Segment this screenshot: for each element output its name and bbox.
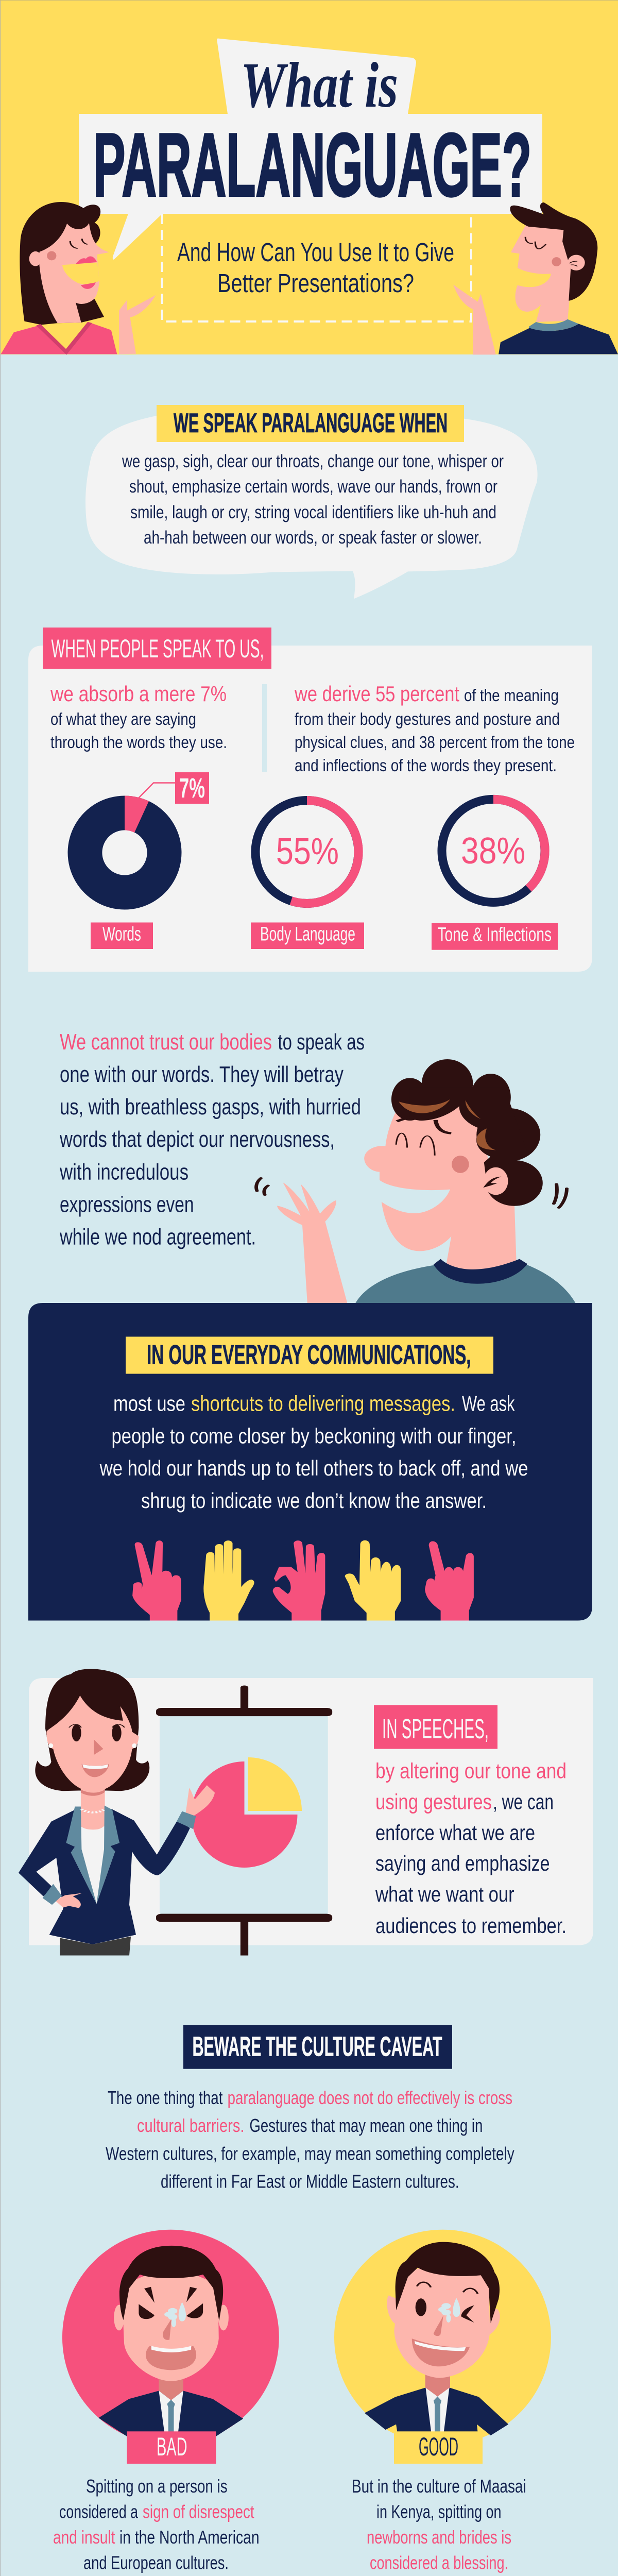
body text xyxy=(53,2476,260,2573)
chart: words donut 7% xyxy=(68,772,209,910)
chart: body language ring 55%: 55% xyxy=(276,831,339,872)
body text: , we can xyxy=(493,1790,554,1814)
heading xyxy=(157,405,464,442)
collar xyxy=(434,1259,527,1284)
body text xyxy=(122,451,504,548)
body text: considered a xyxy=(59,2501,139,2522)
label: body language: Body Language xyxy=(260,924,355,945)
body text: Spitting on a person is xyxy=(86,2476,228,2497)
panel background xyxy=(28,1303,592,1621)
panel: bad example xyxy=(53,2230,279,2573)
body text: and European cultures. xyxy=(83,2552,229,2573)
column divider xyxy=(262,684,267,772)
label: tone and inflections xyxy=(432,923,558,950)
text block: we cannot trust our bodies: with incredulous xyxy=(59,1159,188,1185)
body text xyxy=(99,1392,528,1513)
illustration: talking man xyxy=(453,202,618,354)
label: bad: BAD xyxy=(157,2432,187,2461)
eyes xyxy=(396,1133,435,1156)
right text: from their body gestures and posture and xyxy=(295,709,560,728)
illustration: presenting woman xyxy=(19,1669,215,1956)
speech bubble xyxy=(85,416,538,599)
body text: shrug to indicate we don’t know the answer. xyxy=(141,1488,487,1513)
illustration: talking woman xyxy=(1,202,156,354)
icon: open hand xyxy=(203,1540,254,1621)
body text: most use xyxy=(113,1392,185,1416)
subtitle xyxy=(177,238,454,298)
right text: of the meaning xyxy=(464,686,559,705)
body text: newborns and brides is xyxy=(367,2527,511,2548)
left text xyxy=(50,682,227,752)
section: beware the culture caveat xyxy=(106,2025,514,2192)
motion lines xyxy=(256,1178,567,1208)
left text: through the words they use. xyxy=(50,733,227,752)
body text: using gestures xyxy=(375,1790,492,1814)
body text xyxy=(375,1758,566,1938)
body text: by altering our tone and xyxy=(375,1758,566,1783)
body text: We ask xyxy=(462,1392,515,1416)
body text: audiences to remember. xyxy=(375,1913,566,1938)
ear xyxy=(484,1167,508,1195)
body text: Gestures that may mean one thing in xyxy=(249,2115,483,2136)
label: words: Words xyxy=(102,924,141,945)
body text: The one thing that xyxy=(108,2087,222,2108)
body text: shortcuts to delivering messages. xyxy=(191,1392,455,1416)
chart: tone and inflections ring 38% xyxy=(442,799,545,902)
body text: smile, laugh or cry, string vocal identifiers like uh-huh and xyxy=(130,502,496,522)
hair xyxy=(391,1059,543,1206)
panel: we speak paralanguage when xyxy=(85,405,538,599)
chart: tone and inflections ring 38%: 38% xyxy=(461,831,525,872)
body text: Western cultures, for example, may mean something completely xyxy=(106,2143,514,2164)
heading: WHEN PEOPLE SPEAK TO US, xyxy=(52,634,264,663)
left text: we absorb a mere 7% xyxy=(50,682,227,706)
label: words xyxy=(91,922,153,949)
blush xyxy=(452,1156,469,1173)
heading xyxy=(126,1336,493,1374)
panel background xyxy=(29,1678,593,1945)
label: tone and inflections: Tone & Inflections xyxy=(438,924,552,946)
body text: different in Far East or Middle Eastern cultures. xyxy=(161,2171,459,2192)
body text xyxy=(106,2087,514,2192)
label: good xyxy=(394,2431,483,2464)
body text: cultural barriers. xyxy=(137,2115,244,2136)
heading xyxy=(374,1705,497,1749)
body text: in the North American xyxy=(119,2527,260,2548)
right text: and inflections of the words they present. xyxy=(295,756,557,775)
text block: we cannot trust our bodies: to speak as xyxy=(278,1029,365,1055)
icon: pointing hand xyxy=(345,1540,401,1621)
text block: we cannot trust our bodies xyxy=(59,1029,365,1250)
icons: hand gestures xyxy=(132,1540,474,1621)
body text: saying and emphasize xyxy=(375,1851,550,1875)
text block: we cannot trust our bodies: us, with breathless gasps, with hurried xyxy=(60,1094,361,1120)
body text: shout, emphasize certain words, wave our hands, frown or xyxy=(129,477,497,497)
body text: and insult xyxy=(53,2527,115,2548)
illustration: winking man in yellow circle xyxy=(334,2230,551,2445)
head and neck xyxy=(364,1103,517,1271)
icon: horns hand xyxy=(425,1541,474,1621)
body text xyxy=(352,2476,526,2573)
panel: when people speak to us xyxy=(28,628,592,972)
body text: what we want our xyxy=(375,1882,514,1906)
panel: good example xyxy=(334,2230,551,2573)
title: What is: What is xyxy=(241,50,398,121)
text block: we cannot trust our bodies: one with our words. They will betray xyxy=(60,1062,344,1087)
label: body language xyxy=(251,922,364,949)
subtitle: And How Can You Use It to Give xyxy=(177,238,454,267)
heading xyxy=(43,628,271,669)
heading xyxy=(183,2025,452,2069)
body text: ah-hah between our words, or speak faster or slower. xyxy=(144,528,482,548)
shirt xyxy=(355,1264,576,1304)
body text: considered a blessing. xyxy=(370,2552,508,2573)
body text: sign of disrespect xyxy=(143,2501,254,2522)
header: title area xyxy=(1,39,618,354)
icon: peace hand xyxy=(132,1540,181,1621)
body text: people to come closer by beckoning with our finger, xyxy=(111,1423,516,1448)
right text: we derive 55 percent xyxy=(294,682,459,706)
text block: we cannot trust our bodies: We cannot trust our bodies xyxy=(60,1029,272,1055)
label: good: GOOD xyxy=(419,2432,458,2461)
illustration: laughing man xyxy=(256,1059,576,1304)
subtitle: Better Presentations? xyxy=(217,268,414,298)
subtitle dashed frame xyxy=(162,214,471,321)
body text: paralanguage does not do effectively is cross xyxy=(228,2087,512,2108)
chart: body language ring 55% xyxy=(255,801,358,904)
text block: we cannot trust our bodies: while we nod agreement. xyxy=(59,1225,256,1250)
body text: we hold our hands up to tell others to back off, and we xyxy=(99,1456,528,1480)
body text: we gasp, sigh, clear our throats, change our tone, whisper or xyxy=(122,451,504,471)
panel: in speeches xyxy=(19,1669,593,1956)
chart: pie on board xyxy=(192,1757,302,1868)
right text xyxy=(294,682,575,775)
chart: words donut 7%: 7% xyxy=(179,773,205,804)
body text: But in the culture of Maasai xyxy=(352,2476,526,2497)
illustration: angry man in pink circle xyxy=(62,2230,279,2445)
illustration: presentation board xyxy=(156,1685,332,1956)
icon: ok hand xyxy=(273,1540,325,1621)
label: bad xyxy=(127,2431,216,2464)
panel: everyday communications xyxy=(28,1303,592,1621)
body text: enforce what we are xyxy=(375,1821,535,1845)
heading: IN SPEECHES, xyxy=(382,1714,489,1744)
body text: in Kenya, spitting on xyxy=(376,2501,502,2522)
title speech bubble xyxy=(79,39,542,260)
left text: of what they are saying xyxy=(50,709,196,728)
text block: we cannot trust our bodies: words that depict our nervousness, xyxy=(59,1127,335,1152)
panel background xyxy=(28,646,592,972)
hand xyxy=(277,1182,348,1304)
text block: we cannot trust our bodies: expressions even xyxy=(60,1192,194,1217)
